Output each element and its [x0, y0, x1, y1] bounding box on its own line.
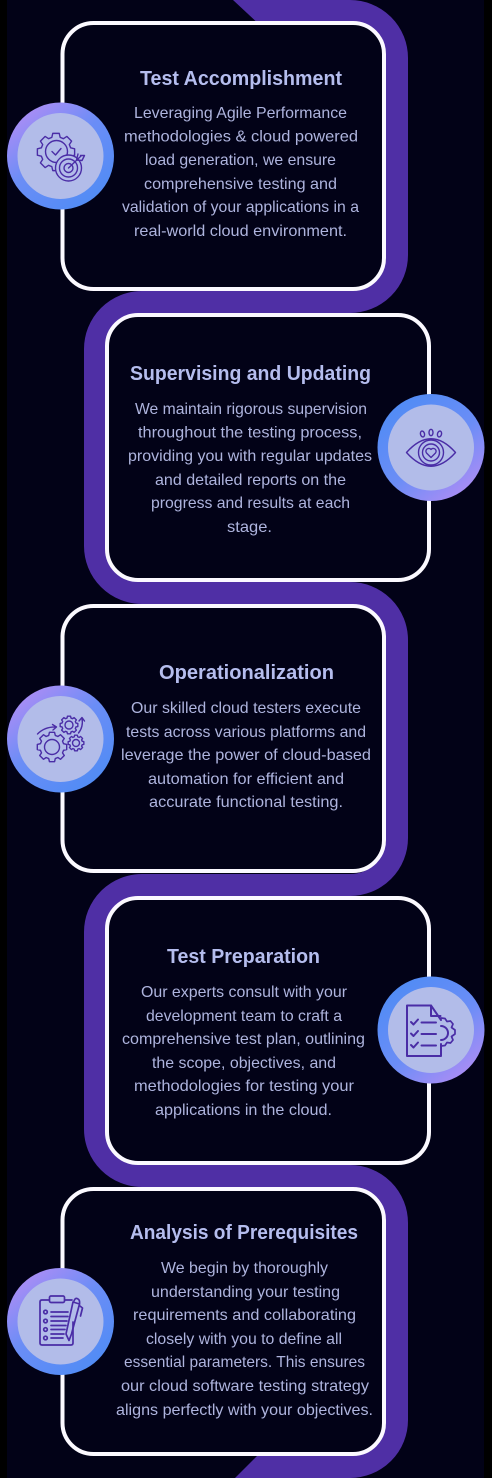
text block: leverage the power of cloud-based	[121, 747, 371, 764]
text block: the scope, objectives, and	[152, 1055, 336, 1072]
text block: our cloud software testing strategy	[121, 1378, 369, 1395]
text block	[122, 984, 365, 1119]
icon: gear with target	[7, 102, 114, 210]
icon: three gears	[7, 686, 114, 792]
text block: tests across various platforms and	[126, 724, 366, 741]
heading: Operationalization	[159, 662, 334, 684]
text block: validation of your applications in a	[122, 199, 359, 216]
panel: analysis of prerequisites	[62, 1189, 384, 1454]
text block: accurate functional testing.	[149, 794, 343, 811]
text block: applications in the cloud.	[155, 1102, 332, 1119]
text block	[128, 401, 372, 536]
icon: eye with check	[378, 394, 484, 501]
text block: aligns perfectly with your objectives.	[116, 1402, 373, 1419]
text block: We maintain rigorous supervision	[135, 401, 367, 418]
text block: understanding your testing	[151, 1284, 340, 1301]
text block	[116, 1260, 373, 1419]
text block: methodologies for testing your	[134, 1078, 355, 1095]
text block: automation for efficient and	[148, 771, 344, 788]
panel: supervising and updating	[107, 315, 429, 580]
text block	[122, 105, 359, 240]
text block: real-world cloud environment.	[134, 223, 347, 240]
text block: Our skilled cloud testers execute	[131, 700, 361, 717]
text block: development team to craft a	[146, 1008, 342, 1025]
text block: providing you with regular updates	[128, 448, 372, 465]
text block: and detailed reports on the	[155, 472, 346, 489]
icon: checklist document with gear	[378, 976, 484, 1084]
heading: Supervising and Updating	[130, 363, 371, 385]
panel: operationalization	[62, 606, 384, 871]
heading: Analysis of Prerequisites	[130, 1222, 358, 1244]
text block: We begin by thoroughly	[161, 1260, 328, 1277]
panel: test accomplishment	[62, 23, 384, 289]
purple connector band	[95, 0, 397, 1478]
text block: requirements and collaborating	[133, 1307, 356, 1324]
heading: Test Preparation	[167, 946, 320, 968]
heading: Test Accomplishment	[140, 68, 342, 90]
text block	[121, 700, 371, 811]
text block: Leveraging Agile Performance	[134, 105, 347, 122]
text block: stage.	[227, 519, 272, 536]
text block: Our experts consult with your	[141, 984, 348, 1001]
text block: comprehensive test plan, outlining	[122, 1031, 365, 1048]
text block: methodologies & cloud powered	[124, 128, 358, 146]
text block: essential parameters. This ensures	[124, 1354, 365, 1371]
panel: test preparation	[107, 898, 429, 1163]
text block: closely with you to define all	[146, 1331, 342, 1348]
text block: comprehensive testing and	[144, 176, 337, 193]
text block: load generation, we ensure	[145, 152, 336, 169]
icon: clipboard with pen	[7, 1268, 114, 1375]
text block: progress and results at each	[151, 495, 350, 512]
text block: throughout the testing process,	[138, 424, 362, 442]
